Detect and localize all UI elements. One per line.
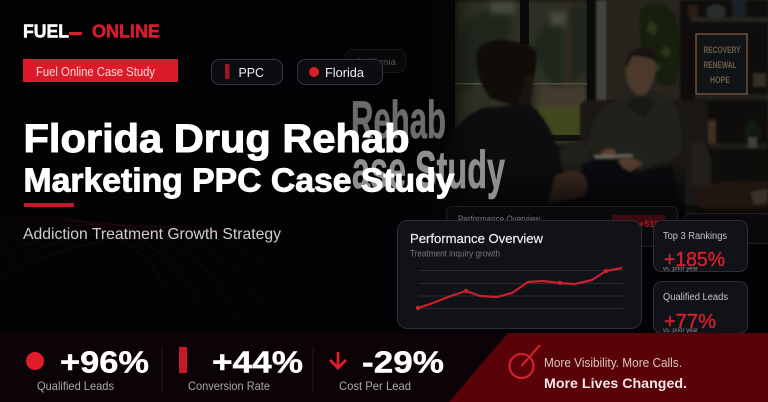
- stat: cost per lead: [330, 344, 444, 393]
- photo: sign reading recovery, renewal, hope: RECOVERY: [704, 45, 740, 55]
- panel: qualified leads: [654, 282, 748, 334]
- photo: counsellor figure: [578, 47, 682, 205]
- photo: window with palms: [455, 0, 588, 145]
- background card: performance overview: [446, 206, 768, 246]
- callout band background: [449, 333, 768, 402]
- callout: More Visibility. More Calls.: [544, 356, 682, 370]
- stat: qualified leads: +96%: [60, 344, 149, 380]
- background card: performance overview: +51%: [639, 219, 662, 229]
- stat: cost per lead: Cost Per Lead: [339, 379, 411, 393]
- panel: top 3 rankings: Top 3 Rankings: [663, 231, 727, 242]
- logo: [23, 22, 160, 42]
- panel: performance overview: [398, 220, 642, 328]
- subheading: Treatment inquiry growth: [410, 248, 500, 258]
- line chart: [416, 268, 623, 310]
- title: Marketing PPC Case Study: [24, 162, 455, 198]
- photo: fade overlays: [425, 0, 768, 335]
- logo: FUEL: [23, 22, 69, 42]
- photo: sign reading recovery, renewal, hope: HOPE: [710, 75, 730, 85]
- stat: conversion rate: [179, 344, 303, 393]
- pill: Florida: [298, 60, 382, 84]
- panel: qualified leads: +77%: [664, 311, 716, 333]
- title: [24, 117, 455, 198]
- heading: Performance Overview: [410, 231, 544, 246]
- photo: client seen from behind: [440, 40, 590, 210]
- ghost text: rehab case study: ase Study: [352, 141, 505, 200]
- logo: ONLINE: [92, 22, 160, 42]
- panel: top 3 rankings: vs. prior year: [663, 266, 699, 272]
- icon: target: [510, 345, 540, 378]
- decorative arcs: [0, 217, 405, 333]
- callout: [544, 356, 687, 391]
- pill: PPC: [212, 60, 282, 84]
- photo: darkening overlay: [440, 0, 768, 215]
- stats band: [0, 333, 768, 402]
- subtitle: Addiction Treatment Growth Strategy: [23, 226, 281, 243]
- pill: California (background): [345, 50, 406, 72]
- photo: window mullions: [455, 0, 588, 84]
- photo: shelves and plant: [640, 0, 768, 205]
- pill: Florida: Florida: [325, 65, 365, 80]
- pill: PPC: PPC: [238, 65, 264, 80]
- ghost text: rehab case study: Rehab: [351, 91, 446, 150]
- ghost text: rehab case study: [351, 91, 505, 200]
- stat: cost per lead: -29%: [362, 344, 444, 380]
- panel: top 3 rankings: [654, 220, 748, 272]
- pill: California (background): California: [355, 57, 396, 67]
- badge: case study label: Fuel Online Case Study: [36, 64, 155, 79]
- stat: conversion rate: +44%: [212, 344, 303, 380]
- panel: top 3 rankings: +185%: [664, 249, 725, 271]
- divider: [162, 346, 163, 392]
- photo: sign reading recovery, renewal, hope: RENEWAL: [704, 60, 737, 70]
- title: Florida Drug Rehab: [24, 117, 410, 161]
- stat: qualified leads: [26, 344, 149, 393]
- background card: performance overview: Performance Overview: [458, 214, 540, 224]
- title underline: [24, 203, 74, 207]
- photo: sign reading recovery, renewal, hope: [696, 34, 747, 94]
- stat: conversion rate: Conversion Rate: [188, 379, 270, 393]
- photo: armchair and table: [558, 100, 768, 222]
- divider: [312, 346, 314, 392]
- photo: counselling session: [425, 0, 768, 335]
- stat: qualified leads: Qualified Leads: [37, 379, 114, 393]
- callout: More Lives Changed.: [544, 375, 687, 391]
- panel: qualified leads: Qualified Leads: [663, 292, 728, 303]
- panel: qualified leads: vs. prior year: [663, 327, 699, 334]
- badge: case study label: [23, 59, 178, 82]
- photo: window frame and wall: [430, 0, 768, 150]
